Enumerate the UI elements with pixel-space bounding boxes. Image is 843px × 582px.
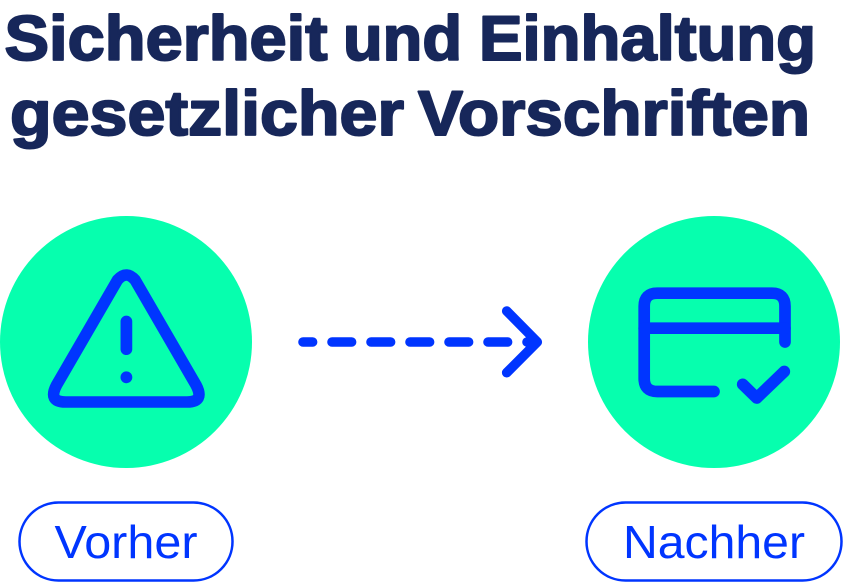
label: Vorher: Vorher xyxy=(54,516,198,568)
title: Einhaltung xyxy=(479,4,816,74)
title: gesetzlicher xyxy=(10,79,404,149)
label: Nachher xyxy=(586,502,842,580)
title: Sicherheit xyxy=(4,4,328,74)
title: Vorschriften xyxy=(418,79,810,149)
title: und xyxy=(343,4,462,74)
icon: warning triangle in green circle xyxy=(0,216,252,468)
icon: card with check mark in green circle xyxy=(588,216,840,468)
label: Vorher xyxy=(20,502,232,580)
label: Nachher: Nachher xyxy=(623,516,805,568)
arrow: dashed arrow from before to after xyxy=(303,311,537,373)
title xyxy=(4,4,816,149)
